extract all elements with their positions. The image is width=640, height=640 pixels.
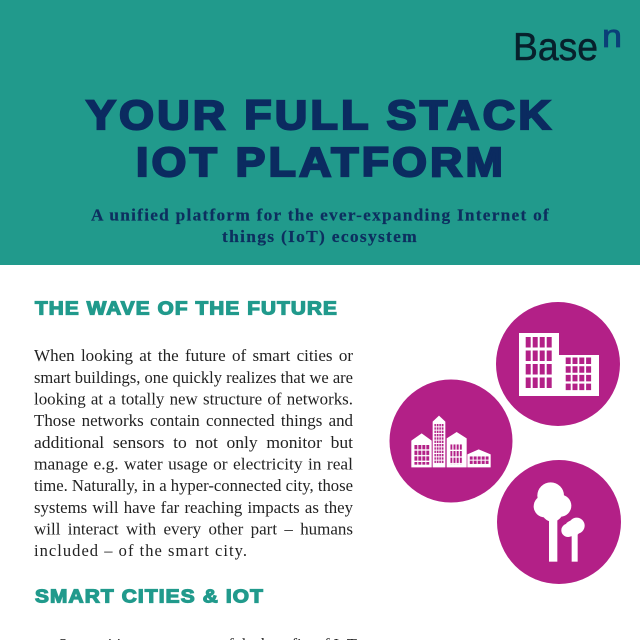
title: YOUR FULL STACK — [86, 92, 554, 138]
logo: Basen: Base — [513, 26, 598, 69]
body paragraph: will interact with every other part – humans — [34, 520, 353, 538]
body paragraph: time. Naturally, in a hyper-connected city, those — [34, 476, 353, 495]
icon: city skyline in circle — [390, 380, 512, 502]
body paragraph: additional sensors to not only monitor but — [34, 433, 353, 452]
heading: the wave of the future: THE WAVE OF THE FUTURE — [35, 298, 338, 318]
logo: Basen: n — [602, 18, 622, 54]
body paragraph: smart buildings, one quickly realizes that we are — [34, 368, 353, 387]
header band — [0, 0, 640, 265]
subtitle: things (IoT) ecosystem — [222, 227, 418, 246]
body paragraph: When looking at the future of smart cities or — [34, 346, 354, 365]
body paragraph — [34, 346, 354, 560]
body paragraph: looking at a totally new structure of networks. — [34, 390, 353, 408]
logo: Basen — [513, 18, 622, 69]
body paragraph: included – of the smart city. — [34, 541, 247, 560]
subtitle — [91, 206, 550, 246]
body paragraph: manage e.g. water usage or electricity in real — [34, 454, 353, 474]
heading: smart cities and iot: SMART CITIES & IOT — [35, 586, 264, 606]
title — [86, 92, 554, 185]
body paragraph: systems will have far reaching impacts as they — [34, 498, 354, 517]
icon: office buildings in circle — [496, 302, 620, 426]
body paragraph: Those networks contain connected things and — [34, 411, 354, 430]
title: IOT PLATFORM — [136, 139, 506, 185]
subtitle: A unified platform for the ever-expanding Internet of — [91, 206, 550, 224]
icon: trees in circle — [497, 460, 621, 584]
